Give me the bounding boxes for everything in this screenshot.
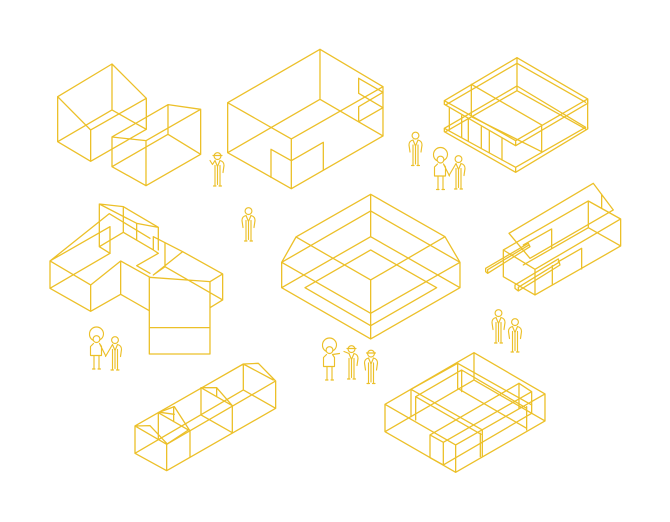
person: woman with halo hair [322, 338, 340, 380]
person: man [492, 310, 505, 343]
person: man with hat waving [210, 153, 224, 186]
person: man [409, 132, 422, 166]
person: man [242, 208, 255, 241]
building: flat roof courtyard pavilion [444, 58, 588, 172]
building: box with nested inner volumes [385, 353, 545, 472]
person: man holding hands [106, 337, 122, 370]
person: man holding hands [449, 156, 465, 189]
building: two offset boxes [58, 64, 201, 186]
person: woman with halo hair [89, 327, 106, 369]
person: man with hat [344, 346, 358, 379]
building: long house with tilted roof and beams [486, 183, 621, 295]
person: man [508, 319, 522, 352]
building: large box with door and windows [228, 49, 383, 189]
person: man with hat [364, 350, 378, 384]
building: central stepped square [282, 194, 460, 339]
building: L-shaped house with skylights [50, 204, 223, 354]
person: woman with halo hair [433, 148, 450, 190]
building: long gabled house with dormers [135, 363, 276, 471]
